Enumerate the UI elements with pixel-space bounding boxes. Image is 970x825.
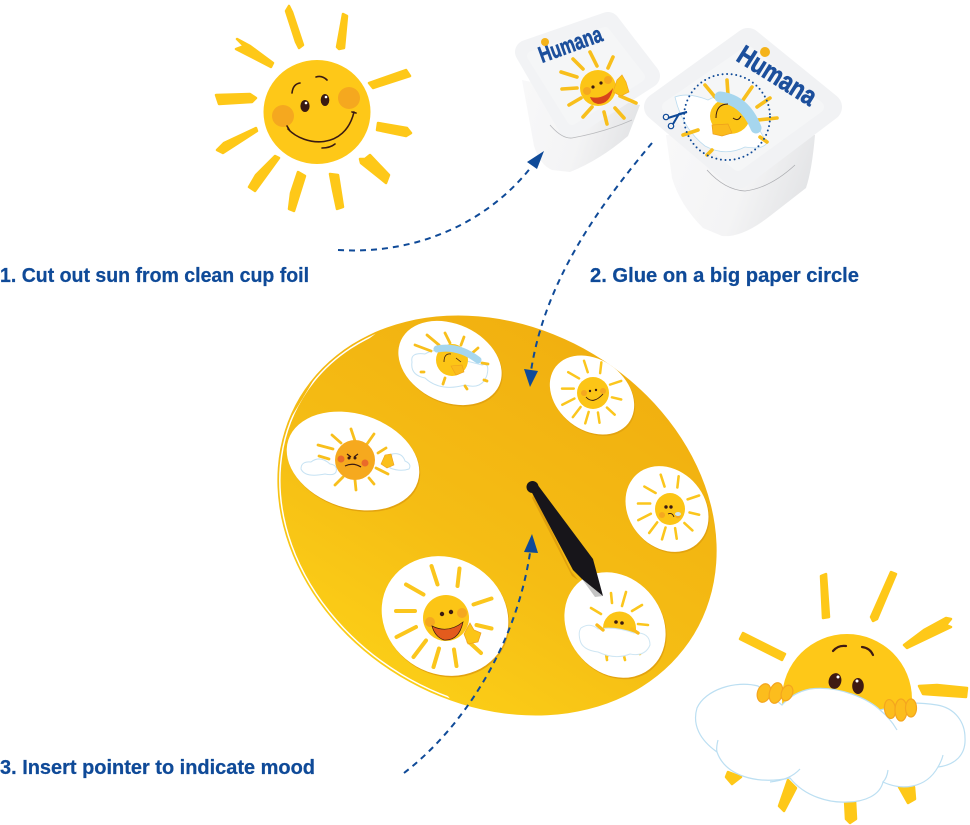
cup body [666, 135, 815, 236]
rim line [550, 120, 632, 138]
cup lid [658, 42, 828, 175]
cheeks [272, 87, 360, 127]
arrow: cup to wheel [524, 143, 652, 387]
arrow: sun to cup [338, 151, 544, 250]
mood card: crying [608, 449, 727, 570]
sun face [264, 60, 370, 164]
mood card: angry [274, 395, 433, 528]
sun head [782, 634, 912, 764]
lid inner panel [532, 32, 640, 120]
pointer [526, 481, 603, 597]
pointer shadow on card [582, 579, 603, 597]
cup body [522, 80, 640, 172]
rim line [707, 165, 795, 191]
cup lid [527, 24, 648, 126]
step 1 label: 1. Cut out sun from clean cup foil [0, 264, 309, 287]
logo sun [541, 38, 549, 46]
pointer blade [530, 484, 603, 596]
brows [833, 646, 873, 655]
mood card: peeking over cloud [543, 552, 688, 700]
sun with thumb up [561, 52, 636, 124]
mood wheel [277, 316, 717, 716]
sun rays [216, 6, 411, 211]
smile and brows [287, 76, 356, 148]
lid inner panel [668, 52, 818, 165]
mood card: happy [534, 339, 651, 452]
sleeping sun on cloud [675, 80, 777, 155]
mood card: sleeping [385, 305, 516, 423]
logo sun [760, 47, 770, 57]
wheel white edge [279, 334, 450, 698]
cloud inner folds [717, 710, 943, 782]
dotted cut circle [684, 74, 770, 160]
cup: left [522, 21, 648, 172]
cup: right [658, 40, 828, 236]
rays [726, 572, 967, 823]
step 2 label: 2. Glue on a big paper circle [590, 264, 859, 287]
eyes [827, 672, 864, 694]
big sun peeking over cloud [696, 572, 967, 823]
step 3 label: 3. Insert pointer to indicate mood [0, 756, 315, 779]
icon: scissors [663, 112, 687, 129]
left fingers [755, 681, 795, 705]
eyes [300, 94, 329, 112]
pointer shadow on disc [532, 494, 578, 580]
big smiling sun [216, 6, 411, 211]
cloud [696, 684, 965, 802]
arrow: label to pointer [404, 534, 538, 773]
pointer pin [526, 481, 538, 493]
brand: Humana: Humana [535, 21, 606, 68]
brand: Humana: Humana [732, 40, 823, 112]
wheel disc [203, 236, 791, 795]
right fingers [883, 699, 916, 721]
mood card: laughing [360, 533, 531, 700]
